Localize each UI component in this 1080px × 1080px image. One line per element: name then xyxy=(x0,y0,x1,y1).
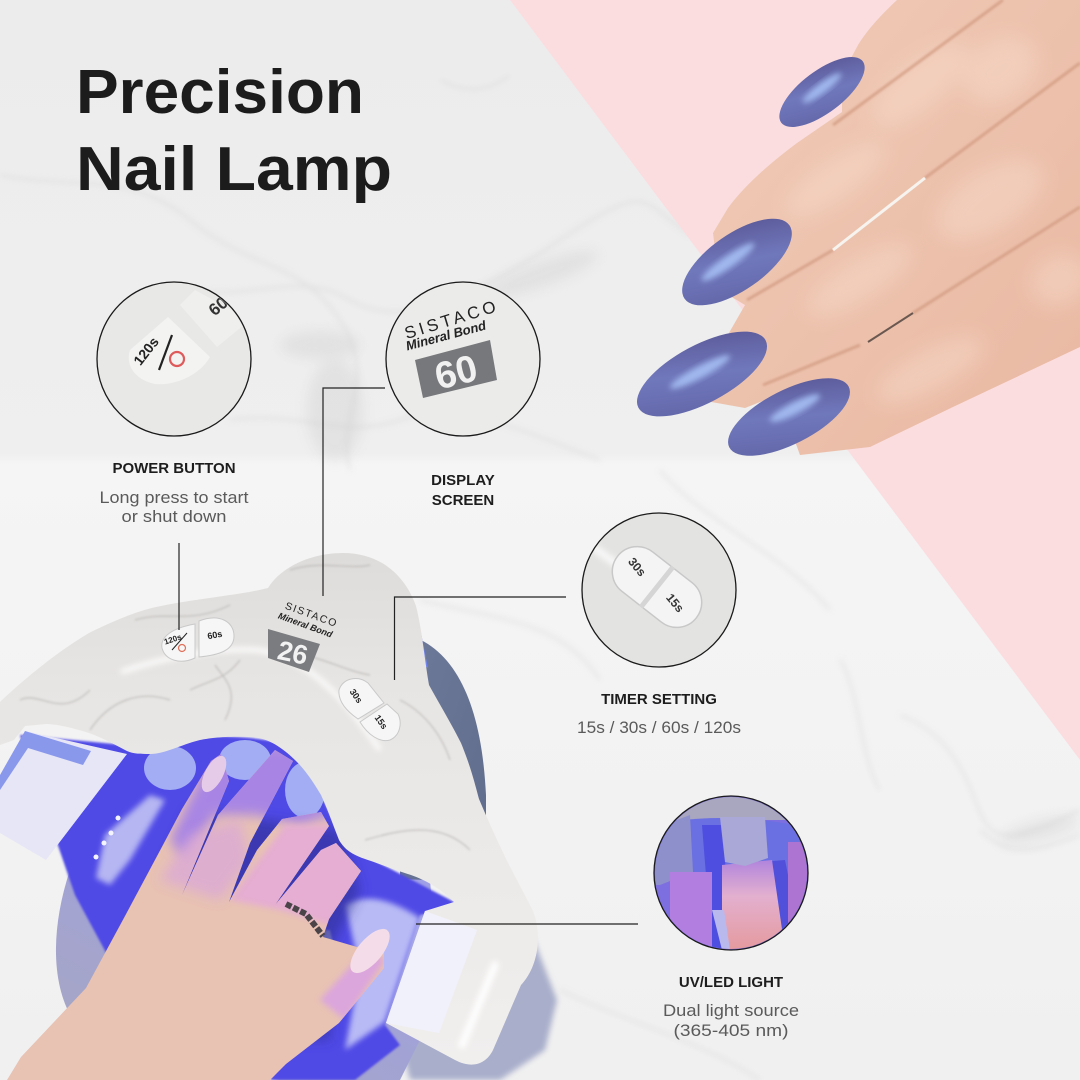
label: display screen: DISPLAY xyxy=(431,472,495,489)
lamp base disc xyxy=(395,620,486,880)
30s button xyxy=(339,679,384,719)
title: Nail Lamp xyxy=(76,135,392,204)
lamp highlight leg xyxy=(462,965,495,1045)
marble veins on lamp xyxy=(20,565,470,850)
leader line: power button xyxy=(178,543,180,630)
callout: display screen circle xyxy=(386,282,540,436)
15s button xyxy=(360,704,400,741)
lamp hump back light xyxy=(395,608,428,668)
right light pad xyxy=(386,911,477,1033)
callout: timer setting circle xyxy=(582,513,736,667)
brand logo: Mineral Bond xyxy=(277,611,334,640)
nail: middle finger xyxy=(625,315,779,433)
UV glow xyxy=(20,735,460,1080)
callout: power button circle xyxy=(97,282,251,436)
callout: display screen circle: Mineral Bond xyxy=(404,317,489,353)
label: UV/LED light: Dual light source xyxy=(663,1001,799,1020)
nail: ring finger xyxy=(669,202,805,322)
digital display xyxy=(268,629,320,672)
label: power button: POWER BUTTON xyxy=(112,460,236,477)
label: power button: Long press to start xyxy=(100,488,249,507)
nail lamp product with hand inside xyxy=(0,553,557,1080)
label: timer setting: 15s / 30s / 60s / 120s xyxy=(577,718,741,737)
fingernail xyxy=(343,923,397,979)
hand with polished nails xyxy=(625,0,1080,471)
label: display screen: SCREEN xyxy=(432,492,494,509)
pink corner panel xyxy=(510,0,1080,760)
digital display: 26 xyxy=(275,635,311,671)
15s button: 15s xyxy=(373,713,389,731)
30s button: 30s xyxy=(348,687,364,705)
label: UV/LED light xyxy=(663,974,799,1040)
tray highlight right xyxy=(345,899,420,1050)
lamp arc body xyxy=(0,553,538,1065)
finger slot nubs xyxy=(144,740,325,818)
label: power button xyxy=(100,460,249,526)
left pad blue edge xyxy=(0,731,91,790)
nail: index finger xyxy=(717,363,861,471)
callout: display screen circle: 60 xyxy=(431,347,482,398)
callout: timer setting circle: 30s xyxy=(625,555,649,579)
LED dots xyxy=(94,816,120,860)
label: power button: or shut down xyxy=(122,507,226,526)
60s button: 60s xyxy=(207,629,223,641)
label: timer setting xyxy=(577,691,741,737)
nail: little finger xyxy=(769,45,875,139)
brand logo: SISTACO xyxy=(283,600,339,630)
leader line: timer setting xyxy=(394,597,566,680)
callout: timer setting circle: 15s xyxy=(663,591,687,615)
cast shadow bottom right xyxy=(400,930,557,1080)
lower tray xyxy=(56,870,440,1080)
fingernail xyxy=(197,752,231,796)
leader line: UV light xyxy=(416,923,638,925)
callout: UV/LED light circle xyxy=(650,790,815,952)
tray highlight left xyxy=(96,795,165,885)
title: Precision xyxy=(76,58,364,127)
120s power button xyxy=(162,624,195,661)
callout: power button circle: 60 xyxy=(205,293,232,320)
fingers silhouette xyxy=(700,0,1080,455)
lamp highlight xyxy=(121,650,380,750)
hand xyxy=(7,745,397,1080)
title xyxy=(76,58,392,204)
brand logo xyxy=(277,600,339,640)
label: UV/LED light: (365-405 nm) xyxy=(674,1021,788,1040)
label: timer setting: TIMER SETTING xyxy=(601,691,717,708)
hand shadow xyxy=(110,810,360,1040)
ring xyxy=(286,904,323,936)
callout: power button circle: 120s xyxy=(130,334,162,368)
120s power button: 120s xyxy=(163,632,183,647)
label: UV/LED light: UV/LED LIGHT xyxy=(679,974,783,991)
callout: display screen circle: SISTACO xyxy=(402,296,501,343)
leader line: display screen xyxy=(323,388,385,596)
60s button xyxy=(199,618,234,657)
label: display screen xyxy=(431,472,495,509)
left light pad xyxy=(0,731,127,860)
